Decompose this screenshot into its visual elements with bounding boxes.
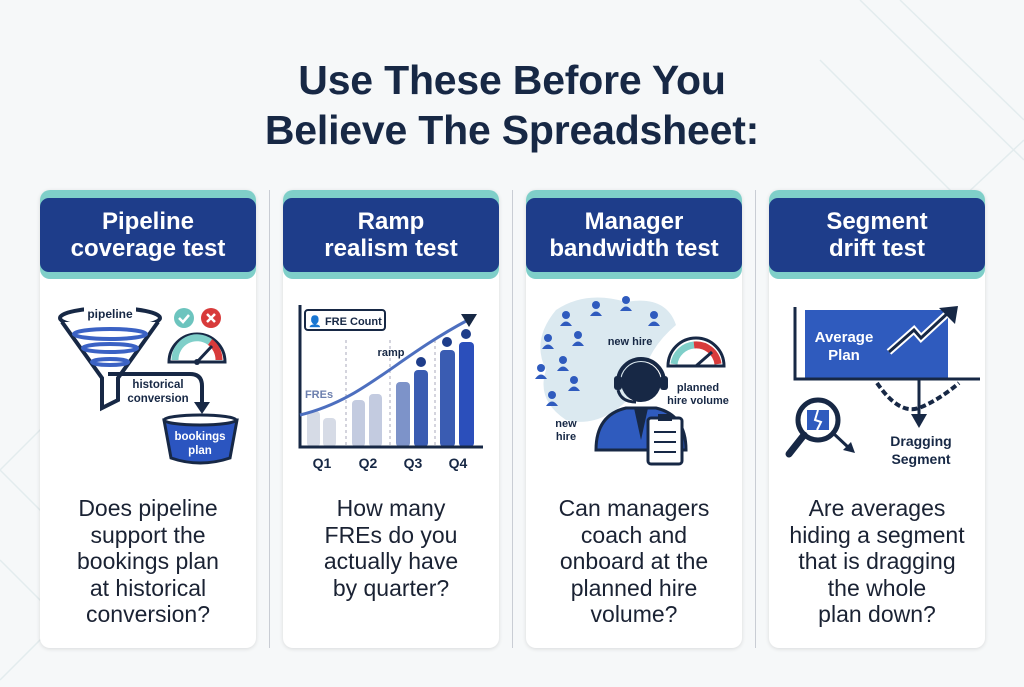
header: segment: Segment: [826, 208, 928, 235]
icon: average plan with dragging segment: [786, 306, 980, 467]
header: pipeline: coverage test: [71, 235, 225, 262]
question text: plan down?: [818, 601, 936, 627]
question text: at historical: [90, 574, 206, 600]
icon: manager with new hires: hire volume: [667, 395, 729, 407]
panel: manager bandwidth: [526, 190, 742, 648]
question text: FREs do you: [325, 522, 457, 548]
chart: FRE ramp bars: Q3: [404, 455, 423, 471]
title: Believe The Spreadsheet:: [265, 107, 759, 153]
question text: [324, 495, 458, 601]
icon: funnel to bookings: plan: [188, 445, 212, 457]
icon: manager with new hires: hire: [556, 431, 576, 443]
chart: FRE ramp bars: Q1: [313, 455, 332, 471]
icon: average plan with dragging segment: Plan: [828, 347, 860, 364]
question text: How many: [337, 495, 445, 521]
icon: funnel to bookings: pipeline: [87, 307, 133, 321]
question text: [559, 495, 709, 627]
chart: FRE ramp bars: Q4: [449, 455, 468, 471]
chart: FRE ramp bars: 👤 FRE Count: [308, 315, 382, 328]
icon: funnel to bookings: bookings: [174, 431, 226, 443]
question text: bookings plan: [77, 548, 219, 574]
header: ramp: Ramp: [358, 208, 424, 235]
chart: FRE ramp bars: Q2: [359, 455, 378, 471]
header: pipeline: [40, 190, 256, 279]
question text: Are averages: [809, 495, 945, 521]
chart: FRE ramp bars: FREs: [305, 389, 333, 401]
question text: volume?: [591, 601, 677, 627]
chart: FRE ramp bars: [298, 305, 483, 471]
question text: hiding a segment: [789, 522, 965, 548]
title: [265, 57, 759, 153]
panel: ramp realism: [283, 190, 499, 648]
question text: [77, 495, 219, 627]
header: segment: [769, 190, 985, 279]
question text: planned hire: [571, 574, 697, 600]
icon: manager with new hires: planned: [677, 382, 719, 394]
header: ramp: [283, 190, 499, 279]
question text: that is dragging: [798, 548, 956, 574]
question text: onboard at the: [560, 548, 708, 574]
question text: coach and: [581, 522, 687, 548]
question text: by quarter?: [333, 574, 449, 600]
question text: the whole: [828, 574, 926, 600]
header: ramp: realism test: [324, 235, 458, 262]
icon: average plan with dragging segment: Average: [815, 329, 873, 346]
header: segment: drift test: [829, 235, 925, 262]
header: pipeline: Pipeline: [102, 208, 194, 235]
icon: average plan with dragging segment: Segment: [891, 451, 951, 467]
question text: Does pipeline: [78, 495, 218, 521]
icon: funnel to bookings: historical: [132, 379, 184, 391]
question text: Can managers: [559, 495, 709, 521]
icon: manager with new hires: new hire: [608, 336, 652, 348]
header: manager: [526, 190, 742, 279]
icon: funnel to bookings: conversion: [127, 393, 189, 405]
question text: [789, 495, 965, 627]
icon: manager with new hires: [535, 296, 729, 466]
icon: manager with new hires: new: [555, 418, 577, 430]
chart: FRE ramp bars: ramp: [378, 347, 405, 359]
icon: average plan with dragging segment: Dragging: [890, 433, 952, 449]
question text: support the: [90, 522, 206, 548]
panel: pipeline coverage: [40, 190, 256, 648]
question text: actually have: [324, 548, 458, 574]
panel: segment drift: [769, 190, 985, 648]
icon: funnel to bookings: [58, 307, 239, 464]
header: manager: bandwidth test: [549, 235, 719, 262]
title: Use These Before You: [298, 57, 726, 103]
question text: conversion?: [86, 601, 210, 627]
header: manager: Manager: [585, 208, 683, 235]
